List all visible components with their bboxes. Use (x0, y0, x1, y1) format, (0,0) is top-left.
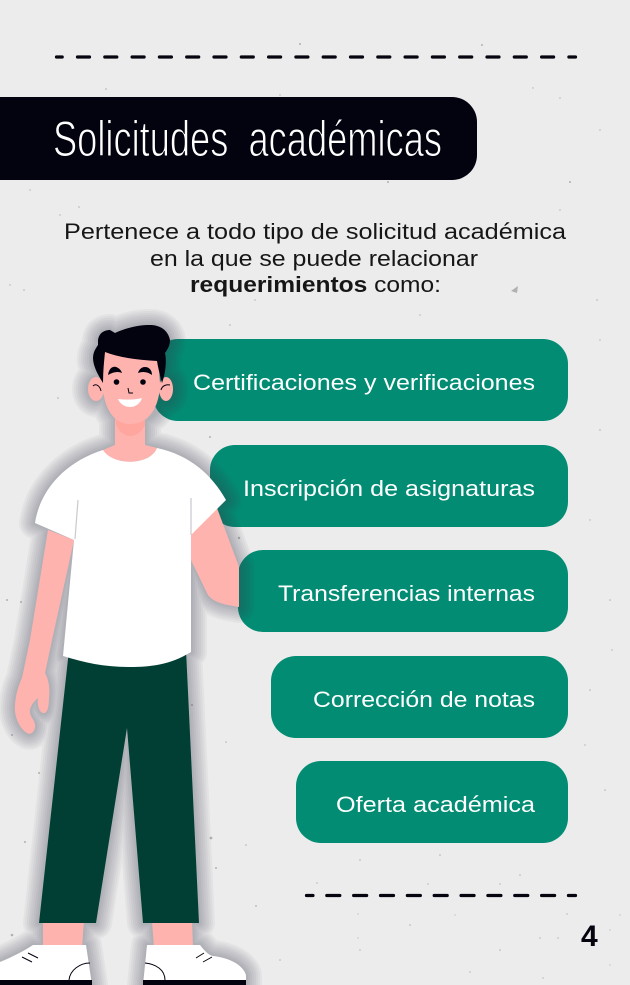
shoe soles (0, 980, 246, 985)
right arm (191, 508, 239, 607)
eyebrows (108, 367, 152, 375)
button: inscripción: Inscripción de asignaturas (243, 476, 535, 501)
t-shirt (35, 448, 226, 667)
page number: 4 (581, 920, 598, 953)
mouth (118, 398, 142, 407)
face (103, 350, 160, 424)
bottom dashed line (306, 894, 576, 897)
ears (88, 377, 104, 401)
title banner: Solicitudes académicas (53, 111, 442, 167)
trousers (39, 650, 199, 923)
button: transferencias: Transferencias internas (278, 581, 535, 606)
button: certificaciones (153, 339, 568, 421)
lower legs (43, 920, 193, 948)
button: inscripción (210, 445, 568, 527)
eyes (114, 379, 119, 385)
intro text (64, 219, 567, 297)
nose (128, 388, 133, 393)
neck shadow (115, 418, 145, 436)
button: oferta: Oferta académica (336, 792, 536, 817)
top dashed line (56, 55, 576, 59)
title banner (0, 97, 477, 180)
hair (93, 325, 170, 383)
button: corrección (271, 656, 568, 738)
button: transferencias (238, 550, 568, 632)
shoes (0, 945, 246, 985)
ear lines (93, 385, 170, 391)
left arm (15, 530, 74, 734)
button: oferta (296, 761, 568, 843)
neck (103, 415, 157, 462)
sleeve creases (75, 498, 191, 539)
figure: standing student (0, 325, 246, 985)
button: corrección: Corrección de notas (313, 687, 535, 712)
button: certificaciones: Certificaciones y verificaciones (193, 370, 535, 395)
intro text: requerimientos como: (190, 272, 441, 297)
intro text: Pertenece a todo tipo de solicitud académica (64, 219, 567, 244)
shoe details (22, 953, 212, 980)
intro text: en la que se puede relacionar (150, 246, 479, 271)
